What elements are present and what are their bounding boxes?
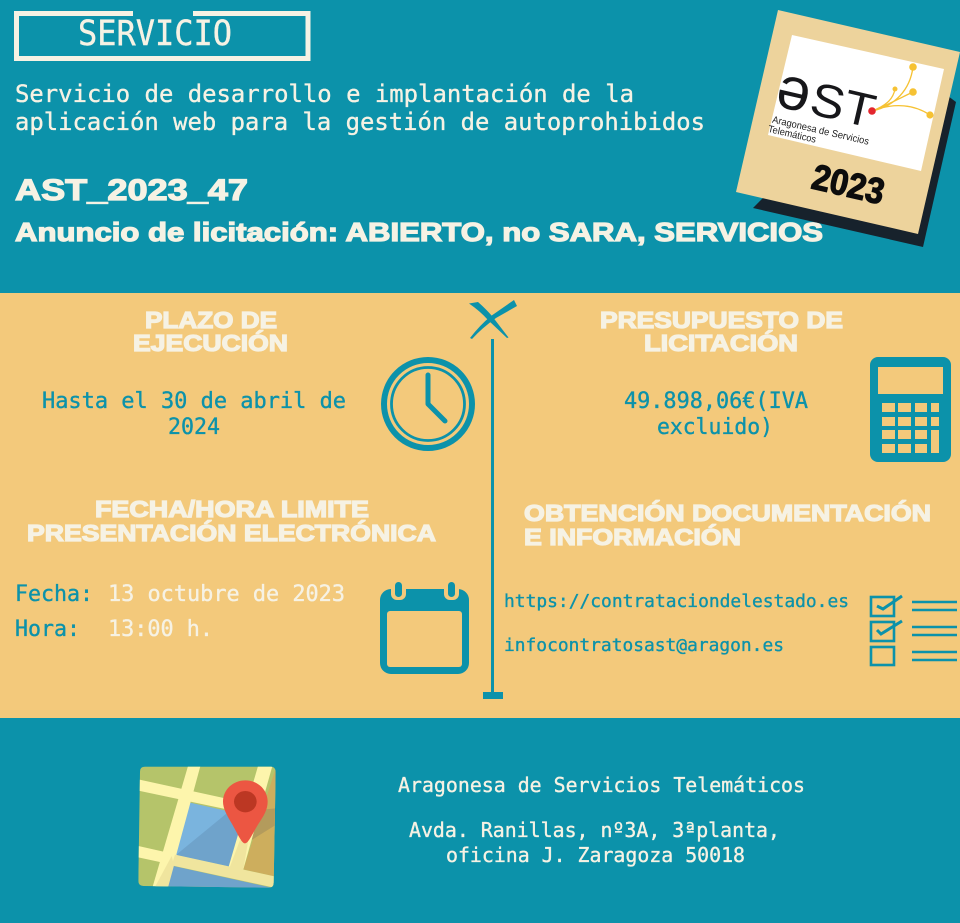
contact links: https://contrataciondelestado.es (504, 591, 849, 612)
logo wordmark: ə (771, 53, 818, 126)
tender reference: AST_2023_47 (15, 174, 248, 207)
card year: 2023 (808, 156, 889, 212)
heading (600, 307, 843, 356)
service description: aplicación web para la gestión de autoprohibidos (15, 108, 705, 136)
budget amount: 49.898,06€(IVA (624, 389, 808, 414)
logo wordmark: ST (805, 71, 881, 138)
panel: electronic submission deadline (15, 496, 469, 674)
deadline date and time: Hora: (15, 617, 80, 642)
period text: Hasta el 30 de abril de (42, 389, 346, 414)
icon: checklist (871, 596, 957, 665)
icon: calendar (380, 582, 469, 674)
contact links (504, 591, 849, 656)
deadline date and time: 13 octubre de 2023 (108, 582, 345, 607)
budget amount (624, 389, 808, 440)
logo branches (868, 63, 934, 119)
panel: footer (137, 765, 805, 890)
period text: 2024 (168, 415, 220, 440)
heading (133, 307, 288, 356)
heading: OBTENCIÓN DOCUMENTACIÓN (524, 499, 931, 526)
heading (27, 496, 436, 546)
heading: E INFORMACIÓN (524, 523, 741, 550)
logo wordmark: Aragonesa de Servicios (771, 115, 870, 148)
heading (524, 499, 931, 550)
heading: PRESUPUESTO DE (600, 307, 843, 333)
service description: Servicio de desarrollo e implantación de la (15, 80, 634, 108)
deadline date and time: 13:00 h. (108, 617, 213, 642)
panel: execution period (42, 307, 472, 448)
period text (42, 389, 346, 440)
service title frame (16, 13, 308, 58)
icon: map with pin (137, 765, 278, 890)
panel: header (15, 10, 960, 247)
tender notice type: Anuncio de licitación: ABIERTO, no SARA, SERVICIOS (15, 217, 823, 247)
panel: documentation and information (504, 499, 957, 665)
deadline date and time (15, 582, 345, 642)
panel: details band (0, 293, 960, 718)
organisation name and address: Avda. Ranillas, nº3A, 3ªplanta, (409, 818, 780, 842)
heading: EJECUCIÓN (133, 329, 288, 356)
heading: PLAZO DE (145, 307, 277, 333)
service title frame: SERVICIO (78, 13, 232, 53)
organisation name and address: Aragonesa de Servicios Telemáticos (398, 773, 805, 797)
logo wordmark: Telemáticos (767, 124, 817, 146)
heading: PRESENTACIÓN ELECTRÓNICA (27, 519, 436, 546)
contact links: infocontratosast@aragon.es (504, 635, 784, 656)
heading: LICITACIÓN (644, 329, 798, 356)
budget amount: excluido) (657, 415, 773, 440)
logo card (736, 10, 960, 247)
service description (15, 80, 705, 136)
organisation name and address (398, 773, 805, 867)
icon: clock (384, 360, 472, 448)
panel: tender budget (600, 307, 951, 462)
icon: scissors and cut line (469, 300, 517, 699)
heading: FECHA/HORA LIMITE (95, 496, 369, 522)
icon: calculator (870, 357, 951, 462)
organisation name and address: oficina J. Zaragoza 50018 (446, 843, 745, 867)
deadline date and time: Fecha: (15, 582, 93, 607)
logo wordmark (767, 53, 884, 157)
